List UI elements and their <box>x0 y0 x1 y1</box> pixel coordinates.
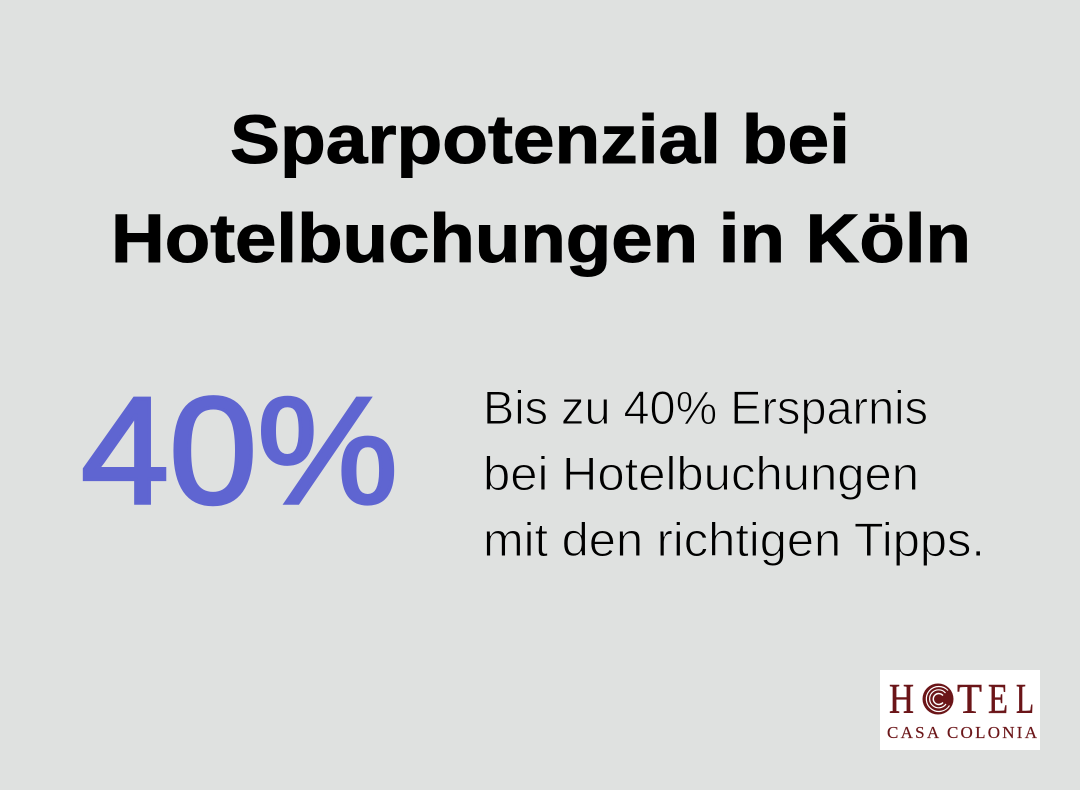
description text: mit den richtigen Tipps. <box>483 513 985 566</box>
logo: Hotel Casa Colonia: L <box>1016 677 1034 723</box>
description text <box>483 381 985 566</box>
title: Sparpotenzial bei <box>230 101 850 178</box>
icon: logo spiral C <box>922 684 954 714</box>
title: Hotelbuchungen in Köln <box>111 200 971 277</box>
logo: Hotel Casa Colonia: CASA COLONIA <box>887 723 1038 742</box>
title <box>111 101 971 277</box>
description text: Bis zu 40% Ersparnis <box>483 381 928 434</box>
logo: Hotel Casa Colonia: H <box>889 677 914 723</box>
logo: Hotel Casa Colonia: E <box>988 677 1008 723</box>
big statistic: 40%: 40% <box>81 366 398 536</box>
logo: Hotel Casa Colonia: T <box>957 677 982 723</box>
logo: Hotel Casa Colonia <box>880 670 1040 750</box>
description text: bei Hotelbuchungen <box>483 447 919 500</box>
